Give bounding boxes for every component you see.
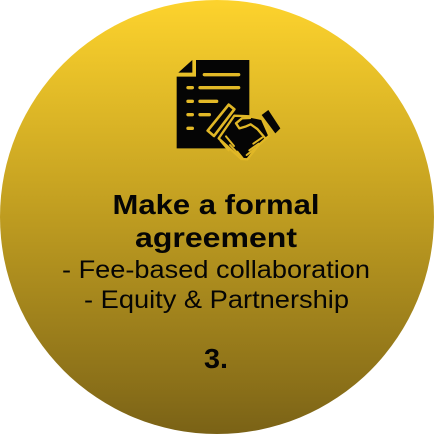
heading bbox=[112, 189, 320, 253]
document bbox=[177, 60, 249, 148]
bullet: fee-based: - Fee-based collaboration bbox=[62, 256, 370, 284]
step number: 3. bbox=[204, 343, 228, 374]
thumb outline bbox=[236, 118, 265, 138]
document page bbox=[177, 60, 249, 148]
handshake bbox=[208, 105, 280, 159]
bullet list bbox=[62, 256, 370, 314]
document folded corner bbox=[178, 60, 192, 73]
left cuff bbox=[208, 105, 234, 136]
document text lines bbox=[188, 75, 239, 128]
icon: document with handshake bbox=[177, 60, 280, 159]
finger gaps bbox=[221, 136, 262, 159]
bullet: equity: - Equity & Partnership bbox=[84, 286, 349, 314]
right cuff bbox=[262, 110, 280, 133]
heading line 2: agreement bbox=[135, 222, 297, 253]
hands bbox=[219, 116, 269, 159]
heading line 1: Make a formal bbox=[112, 189, 320, 220]
